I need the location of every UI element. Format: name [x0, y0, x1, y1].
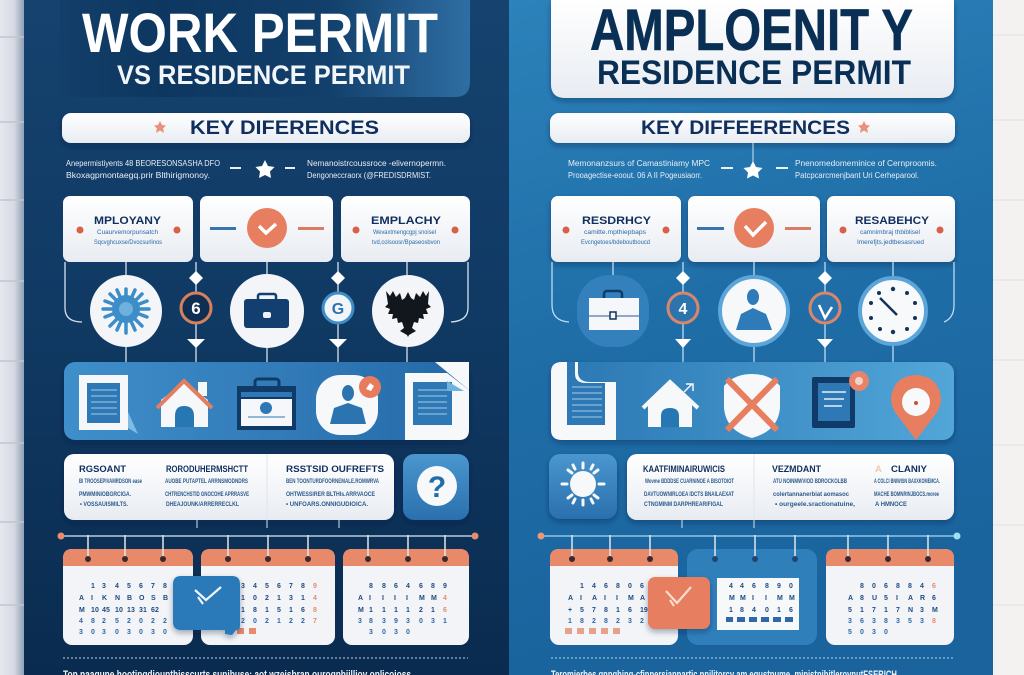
card: resabehcy: RESABEHCY	[855, 215, 930, 227]
calendar 1 left	[63, 535, 193, 645]
intro text right: Pnenomedomeminice of Cernproomis.	[795, 159, 937, 168]
requirements panel right: VEZMDANT	[772, 464, 821, 475]
timeline right	[538, 520, 960, 540]
panel: residence permit (right)	[509, 0, 993, 675]
card: resabehcy: camnimbraj thbiblisel	[860, 229, 921, 236]
intro text left	[66, 159, 446, 180]
calendar 2 left: 345678	[241, 583, 305, 590]
callout: orange check tile	[648, 577, 710, 629]
icon: small ring check right	[810, 293, 840, 323]
calendar 2 right: MMIIMM	[729, 595, 795, 602]
icon: eagle emblem circle	[372, 275, 444, 347]
requirements panel right: A COLCI BNIWISN BAXXKOMEMCA.	[874, 478, 940, 485]
requirements panel right: • ourgeele.sractionatuine,	[775, 501, 855, 508]
heading bar: key differences left	[62, 113, 470, 143]
icon: blue virus circle	[90, 275, 162, 347]
icon: small ring letter left: G	[332, 301, 344, 318]
calendar 2 right: 184016	[729, 607, 793, 614]
intro text right: Patcpcarcmenjbant Uri Cerheparool.	[795, 171, 919, 180]
icon: small ring number left	[181, 293, 211, 323]
panel: work permit (left)	[24, 0, 509, 675]
calendar 2 left: 102131	[241, 595, 305, 602]
requirements panel right: MACHE BOMNRINJBOCS.moree	[874, 491, 939, 498]
requirements panel left: RGSOANT	[79, 464, 126, 475]
requirements panel left: RORODUHERMSHCTT	[166, 464, 248, 475]
dashed divider left	[63, 657, 468, 659]
calendar 3 right: 806884	[860, 583, 924, 590]
icon: small ring number left: 6	[191, 299, 201, 318]
intro text left: Dengoneccraorx (@FREDISDRMIST.	[307, 171, 431, 180]
intro text right: Memonanzsurs of Camastiniamy MPC	[568, 159, 710, 168]
calendar 3 right: 8	[932, 618, 936, 625]
requirements panel left: OHTWESSIRER BLTHIs.ARRVAOCE	[286, 491, 376, 498]
calendar 1 left: 1345678	[91, 583, 167, 590]
dashed divider right	[551, 657, 955, 659]
calendar 3 left	[343, 535, 469, 645]
icon band right	[551, 362, 954, 440]
card: resdrhcy: camitte.mpthiepbaps	[584, 229, 647, 236]
requirements panel left: DHEAJOUNK/ARRERRECLKL	[166, 501, 239, 508]
card: resdrhcy: Evcngetoes/bdeboutboucd	[581, 239, 650, 246]
title box left: WORK PERMIT	[82, 1, 438, 64]
requirements panel right	[627, 454, 954, 520]
icon: document corner left	[405, 362, 469, 440]
icon: location pin	[891, 375, 941, 440]
icon: crossed shield	[724, 374, 780, 438]
requirements panel left: • VOSSAUISMILTS.	[80, 501, 128, 508]
calendar 1 right: 1828232	[568, 618, 644, 625]
calendar 2 left	[201, 535, 335, 645]
heading bar: key differences right	[550, 113, 955, 143]
card: check right	[688, 196, 820, 262]
calendar 3 right: 6	[932, 583, 936, 590]
intro text right: Prooagectise-eoout. 06 A II Pogeusiaorr.	[568, 171, 702, 180]
card: emplachy	[341, 196, 470, 262]
title box right: RESIDENCE PERMIT	[597, 54, 911, 92]
intro text left: Bkoxagpmontaegq.prir Blthirigmonoy.	[66, 171, 210, 180]
requirements panel right: A	[875, 464, 882, 475]
calendar 3 left: 4	[443, 595, 447, 602]
icon: sun tile	[549, 454, 617, 519]
requirements panel right: Wovme BDDDSE CUARNINOE A BISOTOIOT	[645, 478, 734, 485]
requirements panel right: KAATFIMINAIRUWICIS	[643, 464, 725, 475]
icon: open briefcase	[237, 379, 296, 430]
star divider right	[721, 161, 788, 178]
calendar 3 right	[826, 535, 954, 645]
requirements panel left: AUOBE PUTAPTEL ARRNSMODNDRS	[165, 478, 248, 485]
intro text right	[568, 143, 937, 180]
diamonds left	[187, 271, 347, 348]
calendar 3 right: A8U5IAR6	[848, 595, 936, 602]
title box left	[60, 0, 470, 97]
timeline left	[58, 520, 478, 540]
icon: person circle right	[720, 277, 788, 345]
requirements panel left: BEN TOONTURDFOORNEMALE.ROMWRVA	[286, 478, 379, 485]
calendar 1 right: AIAIIMA	[568, 595, 645, 602]
requirements panel right: ATU NOINMWVIOD BDROCKOLBB	[773, 478, 847, 485]
icon: clock circle	[860, 278, 926, 344]
intro text left: Nemanoistrcoussroce -elivernopermn.	[307, 159, 446, 168]
icon band left	[64, 362, 469, 440]
card: emplachy: Wevaxtmengcgpj snoisel	[373, 229, 436, 236]
requirements panel left: PMWMINIOBGRCIGA.	[79, 491, 131, 498]
connector lines right	[552, 262, 954, 362]
title box left: VS RESIDENCE PERMIT	[117, 60, 410, 90]
calendar 3 left: 38393031	[358, 618, 447, 625]
calendar 2 left: 7	[313, 618, 317, 625]
calendar 3 left: 8864689	[369, 583, 447, 590]
calendar 2 left: 181516	[241, 607, 305, 614]
icon: briefcase tile right	[577, 275, 649, 347]
star divider left	[230, 160, 295, 178]
calendar 3 right: 51717N3M	[848, 607, 938, 614]
heading bar: key differences right: KEY DIFFEERENCES	[641, 118, 850, 139]
calendar 2 right: 446890	[729, 583, 793, 590]
calendar 3 left: 6	[443, 607, 447, 614]
calendar 1 right	[550, 535, 678, 645]
calendar 1 left: AIKNBOSB	[79, 595, 168, 602]
requirements panel right: colertannanerbiat aomasoc	[773, 491, 849, 498]
diamonds right	[675, 271, 833, 348]
calendar 2 right	[687, 535, 817, 645]
card: employancy: Cuaurvemorpunsatch	[97, 229, 158, 236]
card: resdrhcy	[551, 196, 681, 262]
card: employancy	[63, 196, 193, 262]
requirements panel left	[64, 454, 394, 520]
calendar 3 left: 3030	[369, 629, 410, 636]
card: resabehcy: Imerefjts.jedtbesasrued	[857, 239, 924, 246]
icon: small ring number right	[668, 293, 698, 323]
card: emplachy: EMPLACHY	[371, 215, 442, 227]
calendar 1 right: 146806	[580, 583, 644, 590]
requirements panel right: A HMNOCE	[875, 501, 908, 508]
heading bar: key differences left: KEY DIFERENCES	[190, 118, 379, 139]
icon: document right	[551, 362, 616, 440]
calendar 2 left: 8	[313, 607, 317, 614]
icon: briefcase circle	[230, 274, 304, 348]
calendar 1 left: 30303030	[79, 629, 167, 636]
requirements panel left: Bl TROOSEPIVAMRDSON ease	[79, 478, 142, 485]
calendar 1 left: M104510133162	[79, 607, 159, 614]
requirements panel left: • UNFOARS.ONNIGUDIOICA.	[286, 501, 368, 508]
title box right	[551, 0, 954, 98]
calendar 2 left: 4	[313, 595, 317, 602]
card: resdrhcy: RESDRHCY	[582, 215, 652, 227]
calendar 2 left: 9	[313, 583, 317, 590]
connector lines left	[65, 262, 468, 362]
requirements panel left: RSSTSID OUFREFTS	[286, 464, 384, 475]
icon: tablet	[812, 371, 869, 428]
icon: person tile	[316, 375, 381, 435]
calendar 3 left: AIIIIMM	[358, 595, 437, 602]
requirements panel right: CLANIY	[891, 464, 928, 475]
card: resabehcy	[827, 196, 955, 262]
card: check left	[200, 196, 333, 262]
calendar 3 right: 5030	[848, 629, 888, 636]
icon: house right	[643, 382, 698, 427]
calendar 3 right: 3638353	[848, 618, 924, 625]
icon: question tile	[403, 454, 469, 520]
intro text left: Anepermistiyents 48 BEORESONSASHA DFO	[66, 159, 220, 168]
icon: question tile: ?	[428, 471, 446, 504]
card: employancy: Sqcvghcuxse/Dvocsurlinos	[94, 239, 163, 246]
calendar 3 left: M111121	[358, 607, 435, 614]
calendar 2 left: 202122	[241, 618, 305, 625]
wall background left	[0, 0, 24, 675]
icon: house left	[157, 381, 212, 427]
requirements panel left: CHTRENCHSTID GNOCOHE APRRASVE	[165, 491, 249, 498]
icon: document left	[79, 375, 138, 434]
calendar 1 left: 48252022	[79, 618, 167, 625]
requirements panel right: DAVTUOWNIRLOEA IDCTS BNAILAEXAT	[644, 491, 734, 498]
requirements panel right: CTNGMINM DARPHREARIFIGAL	[644, 501, 723, 508]
icon: small ring number right: 4	[679, 301, 688, 318]
wall background right	[993, 0, 1024, 675]
calendar 1 right: +5781619	[568, 607, 648, 614]
callout: blue check bubble	[173, 576, 240, 635]
card: emplachy: tvd,colsoosr/Bpaseosbvon	[372, 239, 440, 246]
card: employancy: MPLOYANY	[94, 215, 162, 227]
icon: small ring letter left	[323, 293, 353, 323]
